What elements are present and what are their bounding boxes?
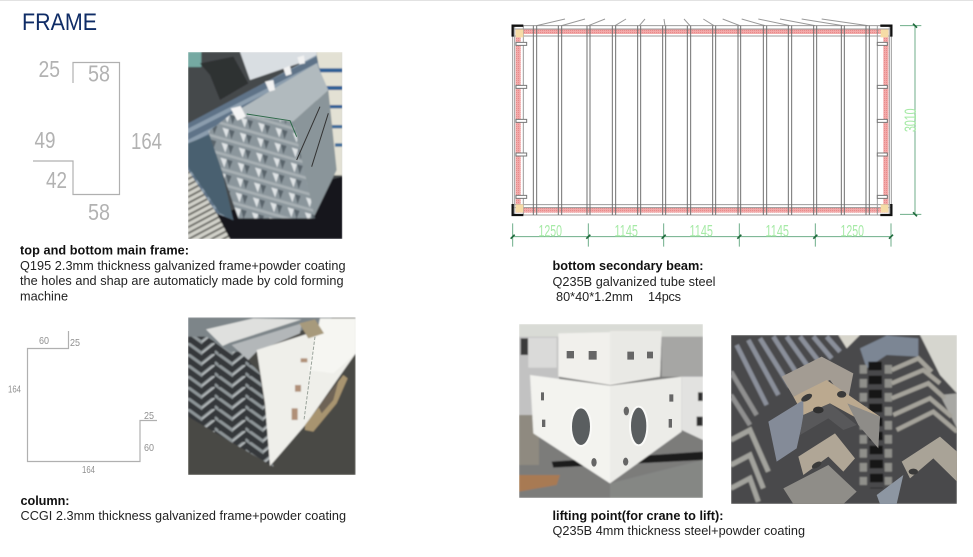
top and bottom main frame profile diagram: 42 xyxy=(46,167,67,193)
dimension labels: 1145 xyxy=(690,222,713,240)
dimension labels: 1145 xyxy=(614,222,638,240)
caption: lifting point: lifting point(for crane to lift): xyxy=(552,509,724,523)
dimension labels: 1250 xyxy=(840,222,864,240)
dimension labels: 1145 xyxy=(766,222,789,240)
top and bottom main frame profile diagram: 58 xyxy=(88,60,110,86)
secondary beams xyxy=(533,26,869,215)
lower brackets xyxy=(798,433,855,475)
width dimensions xyxy=(513,223,891,247)
column profile diagram: 164 xyxy=(82,464,95,476)
right chevron rows xyxy=(892,358,957,432)
column profile diagram: 25 xyxy=(70,337,80,349)
caption: top and bottom main frame xyxy=(20,244,346,304)
column profile diagram: 60 xyxy=(144,442,154,454)
title: FRAME xyxy=(22,9,97,36)
height dimension xyxy=(900,26,921,214)
photo: galvanized corner brackets xyxy=(731,335,957,504)
caption: top and bottom main frame: machine xyxy=(20,290,68,304)
top and bottom main frame profile diagram xyxy=(33,56,162,225)
caption: column xyxy=(20,494,346,523)
column profile diagram xyxy=(8,331,157,476)
caption: bottom secondary beam: bottom secondary beam: xyxy=(552,259,704,273)
caption: top and bottom main frame: the holes and shap are automaticly made by cold forming xyxy=(20,274,344,288)
top and bottom main frame profile diagram: 58 xyxy=(88,199,110,225)
caption: column: CCGI 2.3mm thickness galvanized frame+powder coating xyxy=(20,509,346,523)
caption: bottom secondary beam: 80*40*1.2mm xyxy=(556,290,633,304)
top and bottom main frame profile diagram: 25 xyxy=(38,56,60,82)
photo: stacked columns xyxy=(188,317,356,475)
caption: lifting point: Q235B 4mm thickness steel+powder coating xyxy=(552,524,805,538)
caption: top and bottom main frame: Q195 2.3mm thickness galvanized frame+powder coating xyxy=(20,259,346,273)
column profile diagram: 164 xyxy=(8,384,21,396)
top and bottom main frame profile diagram: 49 xyxy=(34,127,56,153)
dimension labels xyxy=(538,108,920,240)
outer steel outline xyxy=(513,26,891,215)
top and bottom main frame profile diagram: 164 xyxy=(131,128,162,154)
side tabs xyxy=(516,42,887,198)
caption: bottom secondary beam: Q235B galvanized tube steel xyxy=(552,275,716,289)
caption: bottom secondary beam xyxy=(552,259,716,304)
photo: stacked main frame xyxy=(188,52,342,239)
caption: top and bottom main frame: top and bottom main frame: xyxy=(20,244,189,258)
dimension labels: 3010 xyxy=(902,108,920,132)
caption: column: column: xyxy=(20,494,70,508)
column profile diagram: 25 xyxy=(144,410,154,422)
corner castings xyxy=(516,29,888,212)
caption: lifting point xyxy=(552,509,805,538)
caption: bottom secondary beam: 14pcs xyxy=(648,290,681,304)
top centre bracket xyxy=(860,336,918,368)
upper-left rows xyxy=(737,337,840,405)
dimension labels: 1250 xyxy=(538,222,562,240)
centre dark checkered column xyxy=(875,362,877,488)
leader lines xyxy=(537,19,868,26)
lower-left rows xyxy=(731,430,768,502)
main bracket xyxy=(782,356,854,396)
photo: white lifting point corner casting xyxy=(519,324,703,498)
column profile diagram: 60 xyxy=(39,335,49,347)
floor plan: bottom secondary beam layout xyxy=(511,19,921,247)
red perimeter frame xyxy=(516,29,888,213)
